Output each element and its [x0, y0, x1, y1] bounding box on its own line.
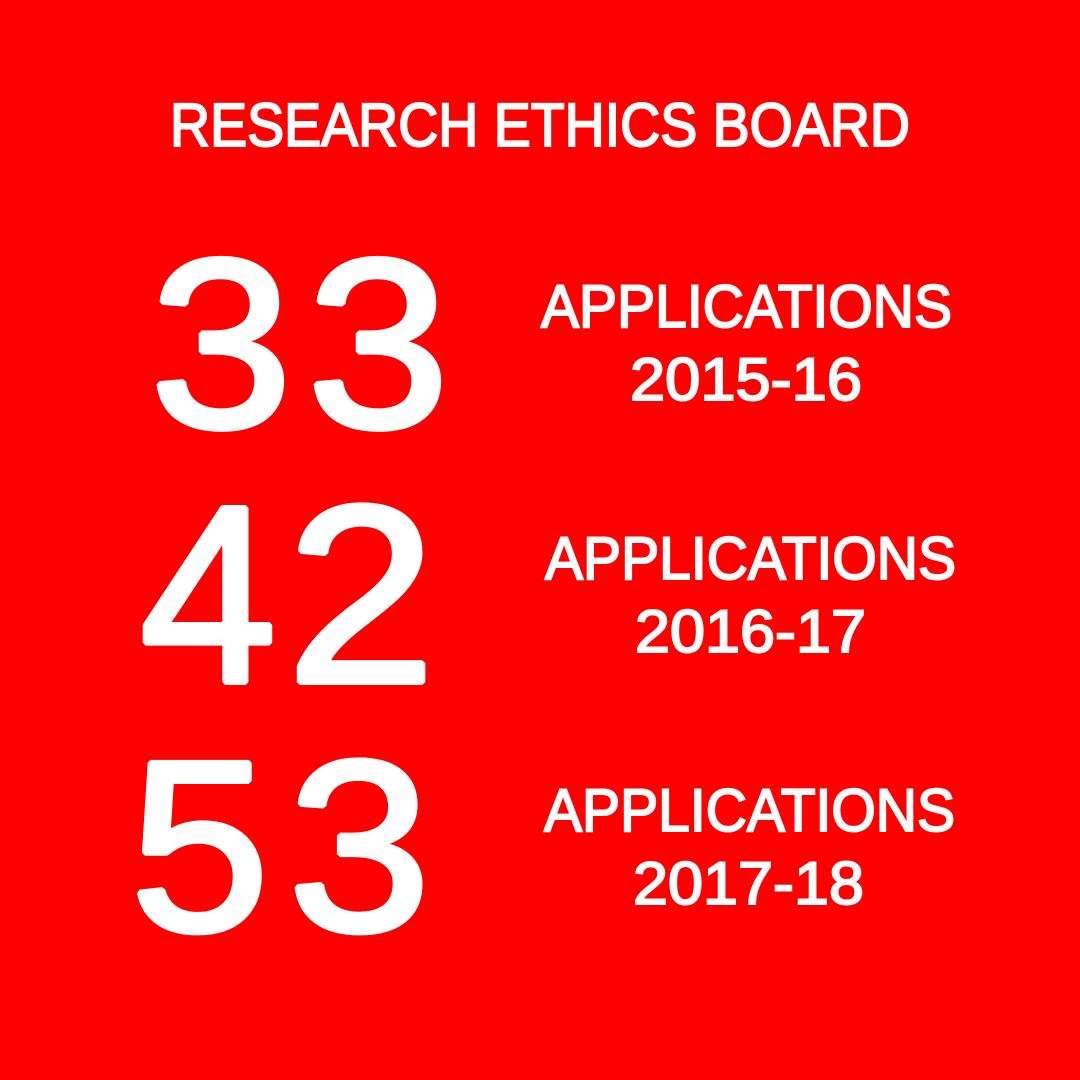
number: 53 applications: 3 — [288, 710, 431, 982]
label: applications 2015-16 — [541, 273, 952, 413]
label: applications 2015-16: APPLICATIONS — [541, 273, 952, 340]
stat row: 2016-17 — [140, 453, 956, 736]
label: applications 2017-18: APPLICATIONS — [544, 777, 955, 844]
title: RESEARCH ETHICS BOARD — [170, 91, 910, 159]
label: applications 2017-18: 2017-18 — [633, 850, 864, 917]
number: 53 applications — [130, 710, 431, 982]
label: applications 2016-17: APPLICATIONS — [545, 525, 956, 592]
number: 33 applications: 3 — [150, 210, 292, 478]
label: applications 2015-16: 2015-16 — [630, 346, 862, 413]
label: applications 2016-17: 2016-17 — [635, 598, 866, 665]
number: 42 applications — [140, 453, 436, 736]
number: 42 applications: 4 — [140, 453, 276, 736]
number: 53 applications: 5 — [130, 711, 269, 982]
label: applications 2017-18 — [544, 777, 955, 917]
label: applications 2016-17 — [545, 525, 956, 665]
number: 33 applications: 3 — [307, 210, 449, 478]
number: 42 applications: 2 — [286, 454, 436, 736]
number: 33 applications — [150, 210, 449, 478]
stat row: 2015-16 — [150, 210, 952, 478]
stat row: 2017-18 — [130, 710, 955, 982]
